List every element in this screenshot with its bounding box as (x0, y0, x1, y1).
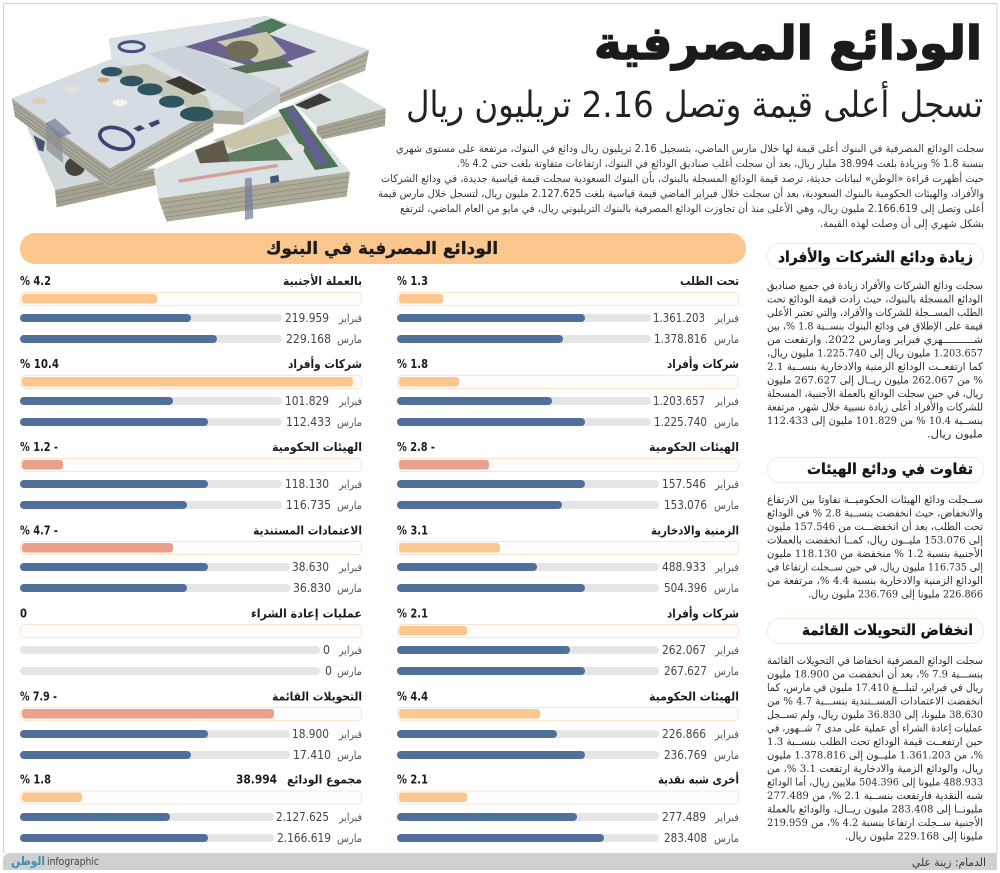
row: government bodies: % 2.8 - (397, 440, 435, 454)
row: companies and individuals: 1.225.740 (654, 415, 707, 429)
panel: companies and individuals deposits: قيمة على الإطلاق في ودائع البنوك بنســبة 1.8 %، بين (767, 320, 983, 332)
row: total deposits: فبراير (338, 811, 362, 824)
row: documentary credits: الاعتمادات المستندية (253, 524, 362, 538)
intro text block: سجلت الودائع المصرفية في البنوك أعلى قيمة لها خلال مارس الماضي، بتسجيل 2.16 تريليون ريال ودائع في البنوك، مرتفعة على مستوى شهري (396, 141, 984, 155)
row: time and savings: 488.933 (662, 560, 706, 574)
panel: current transfers decline: انخفضت الاعتمادات المســتندية بنســـبة 4.7 % من (767, 696, 983, 708)
panel: government deposits: والانخفاض، حيث انخفضت بنســبة 2.8 % في الودائع (767, 508, 983, 520)
panel: companies and individuals deposits: كما ارتفعــت الودائع الزمنية والادخارية بنســبة 2.1 (767, 361, 983, 373)
row: documentary credits: 38.630 (292, 560, 329, 574)
panel: companies and individuals deposits: الطلب المســجلة للشركات والأفراد، والتي تعتبر الأعلى (767, 306, 983, 319)
row: other quasi-cash: مارس (714, 832, 739, 845)
row: total deposits: مارس (337, 832, 362, 845)
row: documentary credits (20, 524, 362, 595)
row: repurchase operations: عمليات إعادة الشراء (251, 606, 362, 620)
row: government bodies: فبراير (714, 478, 739, 491)
row: demand deposits: 1.378.816 (654, 332, 707, 346)
row: government bodies foreign: مارس (337, 499, 362, 512)
panel: government deposits (767, 458, 984, 600)
intro text block: والأفراد، والهيئات الحكومية بالبنوك السعودية، بعد أن سجلت خلال فبراير الماضي قيمة قياسية بلغت 2.127.625 مليون ريال، لتسجل خلال مارس قيمة (378, 186, 984, 200)
row: companies and individuals 2: شركات وأفراد (667, 606, 739, 622)
row: demand deposits: مارس (714, 333, 739, 346)
row: documentary credits: 36.830 (293, 581, 331, 595)
row: repurchase operations: 0 (323, 643, 330, 657)
row: companies and individuals (397, 356, 739, 429)
row: companies and individuals: فبراير (714, 395, 739, 408)
row: documentary credits: فبراير (338, 561, 362, 574)
panel: current transfers decline: شبه النقدية فارتفعت بنســبة 2.1 %، من 277.489 (767, 790, 983, 802)
row: government bodies: الهيئات الحكومية (649, 440, 739, 455)
panel: current transfers decline: ريال في فبراير، لتبلـــغ 17.410 مليون في مارس، كما (767, 682, 983, 694)
row: other quasi-cash: أخرى شبه نقدية (658, 772, 739, 786)
row: government bodies foreign (20, 440, 362, 512)
intro text block: بنسبة 1.8 % وبزيادة بلغت 38.994 مليار ريال، بعد أن سجلت أغلب صناديق الودائع في البنوك، ارتفاعات متفاوتة بلغت حتى 4.2 %. (457, 156, 984, 170)
row: foreign currency: فبراير (338, 312, 362, 325)
row: companies and individuals 2: % 2.1 (397, 606, 428, 620)
panel: companies and individuals deposits: 1.203.657 مليون ريال إلى 1.225.740 مليون ريال، (767, 348, 983, 360)
row: total deposits: % 1.8 (20, 772, 51, 786)
row: time and savings: 504.396 (664, 581, 707, 595)
row: companies and individuals foreign: % 10.4 (20, 357, 59, 371)
panel: current transfers decline: حين ارتفعــت قيمة الودائع تحت الطلب بنســبة 1.3 (767, 736, 983, 748)
row: repurchase operations: 0 (325, 664, 332, 678)
panel: government deposits: الودائع الزمنية والادخارية بنسبة 4.4 %، مرتفعة من (767, 575, 983, 587)
row: companies and individuals: % 1.8 (397, 357, 428, 371)
row: total deposits: 2.166.619 (277, 831, 331, 845)
row: total deposits: مجموع الودائع (287, 772, 362, 788)
panel: current transfers decline: مليونــا إلى 283.408 مليون ريــال، والودائع بالعملة (767, 804, 983, 816)
row: government bodies foreign: 118.130 (285, 477, 329, 491)
row: companies and individuals foreign: 101.829 (285, 394, 329, 408)
row: government bodies 2: 226.866 (662, 727, 706, 741)
row: foreign currency: 229.168 (286, 332, 331, 346)
footer bar: الوطن (11, 854, 45, 869)
row: current transfers: % 7.9 - (20, 690, 57, 704)
row: government bodies 2: الهيئات الحكومية (649, 690, 739, 704)
row: other quasi-cash (397, 772, 739, 845)
footer bar (3, 853, 997, 870)
panel: government deposits: إلى 153.076 مليــون ريال، كمــا انخفضت بالعملات (767, 534, 983, 546)
row: government bodies (397, 440, 739, 512)
title: الودائع المصرفية (594, 16, 982, 70)
footer bar: infographic (47, 856, 99, 868)
footer bar: الدمام: زينة علي (912, 856, 986, 869)
row: government bodies foreign: الهيئات الحكومية (272, 440, 362, 455)
panel: government deposits: 226.866 مليونا إلى 236.769 مليون ريال. (808, 588, 983, 600)
row: other quasi-cash: فبراير (714, 811, 739, 824)
row: companies and individuals: 1.203.657 (653, 394, 705, 408)
panel: current transfers decline: انخفاض التحويلات القائمة (802, 621, 973, 639)
row: companies and individuals 2: فبراير (714, 644, 739, 657)
panel: current transfers decline: 38.630 مليونا، إلى 36.830 مليون ريال، ولم تســجل (767, 709, 983, 721)
row: companies and individuals 2 (397, 606, 739, 678)
chart header: الودائع المصرفية في البنوك (266, 239, 498, 259)
panel: companies and individuals deposits (767, 244, 984, 440)
row: companies and individuals foreign: مارس (337, 416, 362, 429)
row: total deposits (20, 772, 362, 845)
row: demand deposits: تحت الطلب (680, 274, 739, 288)
row: foreign currency: 219.959 (285, 311, 329, 325)
row: government bodies: مارس (714, 499, 739, 512)
panel: current transfers decline: مليونا إلى 229.168 مليون ريال. (845, 830, 983, 842)
panel: government deposits: الأجنبية بنسبة 1.2 % منخفضة من 118.130 مليون (767, 547, 983, 560)
panel: companies and individuals deposits: بنســبة 10.4 % من 101.829 مليون إلى 112.433 (767, 415, 983, 427)
row: demand deposits: % 1.3 (397, 274, 428, 288)
row: government bodies foreign: % 1.2 - (20, 440, 58, 454)
row: demand deposits: 1.361.203 (653, 311, 705, 325)
row: companies and individuals 2: 267.627 (664, 664, 707, 678)
row: current transfers: 17.410 (293, 748, 331, 762)
panel: current transfers decline: سجلت الودائع المصرفية انخفاضا في التحويلات القائمة (767, 655, 983, 667)
chart header (20, 233, 746, 264)
row: demand deposits (397, 274, 739, 346)
row: current transfers: فبراير (338, 728, 362, 741)
row: foreign currency: بالعملة الأجنبية (283, 273, 362, 288)
panel: current transfers decline: ريال، والودائع الزمية والادخارية ارتفعت 3.1 %، من (767, 763, 983, 775)
row: companies and individuals: مارس (714, 416, 739, 429)
panel: companies and individuals deposits: ريال، في حين سجلت الودائع بالعملة الأجنبية، المسجلة (767, 387, 983, 400)
panel: government deposits: ســجلت ودائع الهيئات الحكوميــة تفاوتا بين الارتفاع (767, 494, 983, 506)
row: companies and individuals foreign: شركات وأفراد (288, 356, 362, 372)
panel: companies and individuals deposits: زيادة ودائع الشركات والأفراد (778, 248, 973, 266)
row: repurchase operations: فبراير (338, 644, 362, 657)
panel: current transfers decline: %، من 1.361.203 مليــون إلى 1.378.816 مليون (767, 750, 983, 762)
row: current transfers: التحويلات القائمة (272, 690, 362, 704)
row: time and savings: الزمنية والادخارية (651, 524, 739, 538)
panel: companies and individuals deposits: الودائع المسجلة بالبنوك، حيث زادت قيمة الودائع تحت (767, 294, 983, 306)
row: companies and individuals foreign (20, 356, 362, 429)
row: total deposits: 2.127.625 (276, 810, 329, 824)
row: government bodies 2: فبراير (714, 728, 739, 741)
row: time and savings: % 3.1 (397, 524, 428, 538)
row: other quasi-cash: 277.489 (662, 810, 706, 824)
row: foreign currency: % 4.2 (20, 274, 51, 288)
row: current transfers (20, 690, 362, 762)
row: documentary credits: % 4.7 - (20, 524, 58, 538)
row: time and savings: مارس (714, 582, 739, 595)
row: foreign currency: مارس (337, 333, 362, 346)
row: companies and individuals foreign: 112.433 (286, 415, 331, 429)
panel: government deposits: إلى 116.735 مليون ريال، في حين ســجلت ارتفاعا في (767, 562, 983, 574)
row: government bodies 2: مارس (714, 749, 739, 762)
row: documentary credits: مارس (337, 582, 362, 595)
row: government bodies 2 (397, 690, 739, 762)
row: government bodies: 157.546 (662, 477, 706, 491)
panel: current transfers decline: الأجنبية ســجلت ارتفاعا بنسبة 4.2 %، من 219.959 (767, 816, 983, 829)
row: other quasi-cash: 283.408 (664, 831, 707, 845)
panel: companies and individuals deposits: شــــــــــهري فبراير ومارس 2022. وارتفعت من (767, 334, 983, 346)
panel: companies and individuals deposits: مليون ريال. (927, 428, 983, 440)
panel: current transfers decline: 488.933 مليونا إلى 504.396 ملايين ريال، أما الودائع (767, 774, 983, 788)
panel: companies and individuals deposits: سجلت ودائع الشركات والأفراد زيادة في جميع صناديق (767, 279, 983, 292)
panel: current transfers decline: عمليات إعادة الشراء أي عملية على مدى 7 شــهور، في (767, 720, 983, 734)
row: government bodies 2: % 4.4 (397, 690, 428, 704)
row: current transfers: مارس (337, 749, 362, 762)
row: companies and individuals 2: 262.067 (662, 643, 706, 657)
row: time and savings (397, 524, 739, 595)
image: stacks of Saudi banknotes (12, 16, 386, 222)
row: current transfers: 18.900 (292, 727, 329, 741)
intro text block: بشكل شهري إلى أن وصلت لهذه القيمة. (820, 216, 984, 230)
row: repurchase operations: 0 (20, 606, 27, 620)
row: companies and individuals 2: مارس (714, 665, 739, 678)
panel: current transfers decline (767, 618, 984, 842)
row: companies and individuals foreign: فبراير (338, 395, 362, 408)
row: government bodies: 153.076 (664, 498, 707, 512)
panel: current transfers decline: بنســـبة 7.9 %، بعد أن انخفضت من 18.900 مليون (767, 666, 983, 680)
row: demand deposits: فبراير (714, 312, 739, 325)
row: repurchase operations: مارس (337, 665, 362, 678)
row: government bodies foreign: فبراير (338, 478, 362, 491)
panel: government deposits: تحت الطلب، بعد أن انخفضـــت من 157.546 مليون (767, 519, 983, 533)
panel: government deposits: تفاوت في ودائع الهيئات (807, 460, 973, 478)
intro text block (378, 141, 984, 230)
row: government bodies foreign: 116.735 (286, 498, 331, 512)
panel: companies and individuals deposits: % من 262.067 مليون ريــال إلى 267.627 مليون (767, 374, 983, 386)
intro text block: أعلى وتصل إلى 2.166.619 مليون ريال، وهي الأعلى منذ أن تجاوزت الودائع المصرفية بالبنوك التريليوني ريال، في مايو من العام الماضي، لترتفع (400, 201, 984, 215)
row: total deposits: 38.994 (236, 772, 277, 786)
row: repurchase operations (20, 606, 362, 678)
panel: companies and individuals deposits: للشركات والأفراد أعلى زيادة نسبية خلال شهر، مرتفعة (767, 400, 983, 414)
row: government bodies 2: 236.769 (664, 748, 707, 762)
row: time and savings: فبراير (714, 561, 739, 574)
row: foreign currency (20, 273, 362, 346)
row: companies and individuals: شركات وأفراد (667, 356, 739, 372)
row: other quasi-cash: % 2.1 (397, 772, 428, 786)
